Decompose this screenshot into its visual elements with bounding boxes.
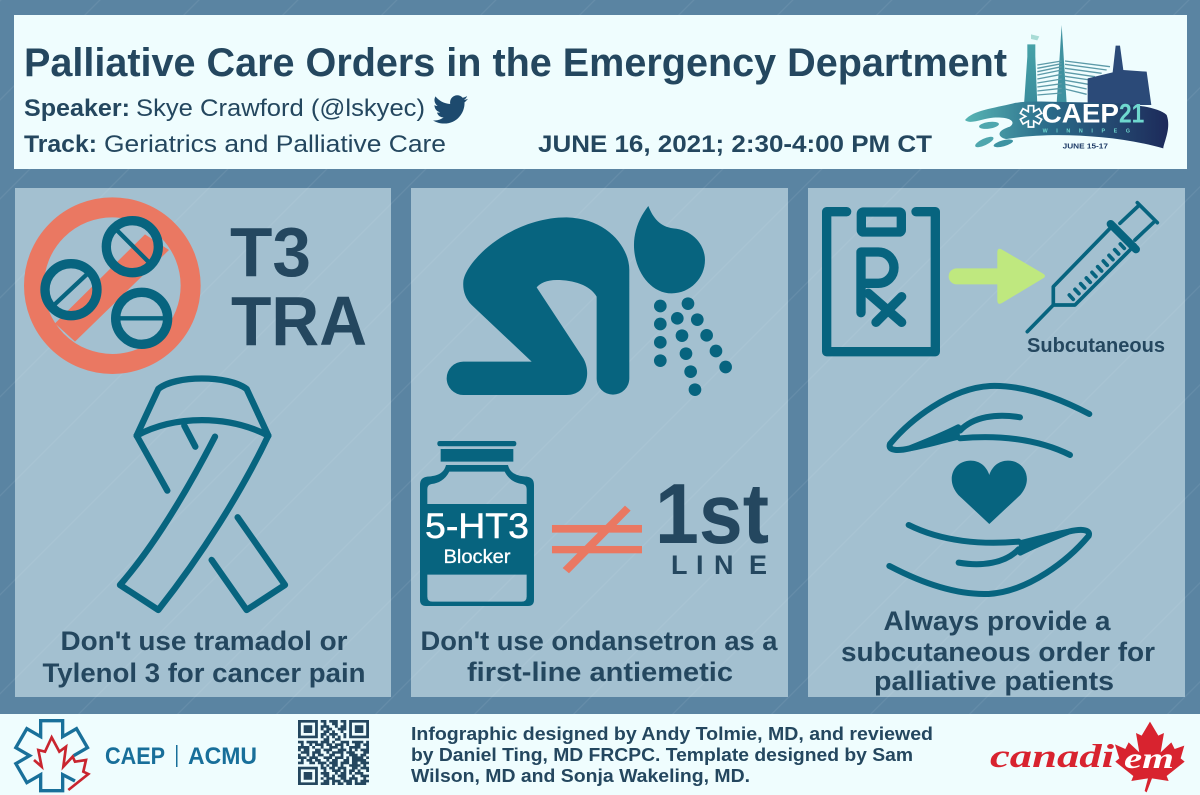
credits line 2: by Daniel Ting, MD FRCPC. Template designed by Sam xyxy=(411,745,913,765)
caption: sub line 1: Always provide a xyxy=(884,606,1112,636)
divider bar xyxy=(176,745,178,767)
logo: CAEP21 Winnipeg: WINNIPEG xyxy=(1043,129,1130,135)
icon: medicine bottle xyxy=(420,441,534,606)
TRA label: TRA xyxy=(231,282,367,360)
icon: cancer ribbon xyxy=(120,378,285,610)
caption: sub line 3: palliative patients xyxy=(874,666,1114,696)
bottom hand xyxy=(889,525,1089,594)
top hand xyxy=(890,386,1089,455)
logo: canadiEM xyxy=(990,722,1185,792)
caption: pain line 2: Tylenol 3 for cancer pain xyxy=(42,658,366,688)
icon: twitter bird xyxy=(433,95,468,124)
logo: CAEP21 Winnipeg xyxy=(965,25,1168,151)
panel: subcutaneous xyxy=(808,188,1185,697)
track name: Geriatrics and Palliative Care xyxy=(104,131,446,158)
caption: nausea line 1: Don't use ondansetron as a xyxy=(420,626,778,656)
icon: not equal sign xyxy=(552,506,642,573)
CAEP wordmark: CAEP xyxy=(105,743,165,770)
logo: CAEP21 Winnipeg: CAEP xyxy=(1042,99,1119,129)
bottle label: Blocker: Blocker xyxy=(444,547,511,568)
footer xyxy=(0,714,1200,795)
credits line 1: Infographic designed by Andy Tolmie, MD, and reviewed xyxy=(411,724,933,744)
date and time: JUNE 16, 2021; 2:30-4:00 PM CT xyxy=(538,131,932,158)
panel: nausea xyxy=(411,188,788,697)
icon: syringe xyxy=(1027,203,1157,332)
caption: pain line 1: Don't use tramadol or xyxy=(60,626,348,656)
icon: prescription clipboard xyxy=(827,212,935,352)
maple leaf xyxy=(1115,722,1185,792)
canadi wordmark: canadi xyxy=(990,739,1115,775)
T3 label: T3 xyxy=(230,213,311,291)
speaker label: Speaker: xyxy=(24,95,130,122)
heart xyxy=(952,461,1027,524)
speaker name: Skye Crawford (@lskyec) xyxy=(136,95,425,122)
header banner xyxy=(14,15,1187,169)
icon: vomiting person xyxy=(447,206,732,396)
bottle label: 5-HT3: 5-HT3 xyxy=(425,507,529,546)
caption: nausea line 2: first-line antiemetic xyxy=(467,657,733,687)
1st text: 1st xyxy=(655,467,769,562)
icon: hands and heart xyxy=(889,386,1089,594)
logo: CAEP21 Winnipeg: JUNE 15-17 xyxy=(1063,142,1108,151)
em wordmark: em xyxy=(1124,742,1174,775)
arrow xyxy=(949,249,1045,304)
panel: pain xyxy=(15,188,391,697)
credits line 3: Wilson, MD and Sonja Wakeling, MD. xyxy=(411,766,750,786)
logo: CAEP star and leaf xyxy=(16,721,88,791)
logo: CAEP21 Winnipeg: 21 xyxy=(1119,99,1144,129)
ACMU wordmark: ACMU xyxy=(188,743,257,770)
track label: Track: xyxy=(24,131,97,158)
caption: sub line 2: subcutaneous order for xyxy=(841,637,1156,667)
QR code xyxy=(298,720,369,785)
LINE text: LINE xyxy=(671,550,767,580)
Subcutaneous label: Subcutaneous xyxy=(1027,335,1165,357)
icon: no pills xyxy=(34,207,191,364)
title: Palliative Care Orders in the Emergency Department xyxy=(24,41,1007,85)
